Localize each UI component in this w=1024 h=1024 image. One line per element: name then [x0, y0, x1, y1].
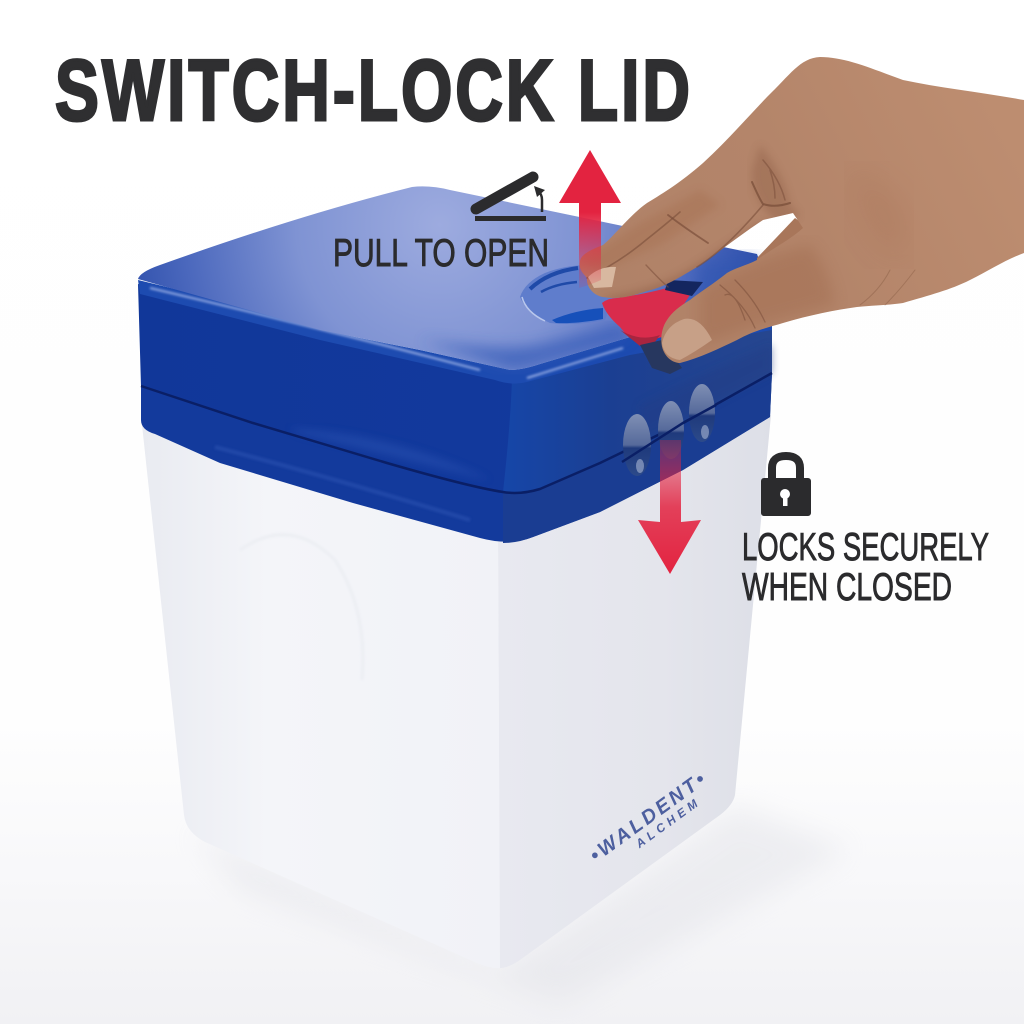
thumbnail [662, 319, 712, 360]
red switch tab [602, 280, 703, 346]
label: pull to open: PULL TO OPEN [333, 232, 549, 275]
lower blue band [141, 373, 772, 543]
container body: right face [498, 415, 771, 968]
hand shading [601, 150, 831, 338]
fingernail [588, 267, 616, 288]
seam line [141, 373, 772, 493]
icon: open lid [475, 177, 546, 221]
brand logo: •WALDENT• [586, 769, 709, 867]
hand [580, 57, 1024, 363]
switch latch below tab [640, 340, 682, 374]
embossed circle on body [240, 535, 363, 680]
finger recess on lid [520, 265, 612, 324]
arrow: pull up [559, 150, 621, 288]
label: locks securely: WHEN CLOSED [742, 566, 952, 609]
title: SWITCH-LOCK LID [55, 43, 693, 139]
brand logo: ALCHEM [632, 796, 701, 851]
finger behind [757, 218, 806, 262]
label: locks securely [742, 526, 989, 609]
knuckle and finger creases [587, 160, 915, 328]
blue lid skirt [138, 284, 772, 493]
lid rim [138, 280, 772, 384]
icon: padlock [761, 456, 811, 516]
rim highlights [150, 288, 623, 378]
floor shadow [190, 805, 850, 1005]
container body: left face [142, 425, 500, 968]
hand silhouette [580, 57, 1024, 363]
lock bumps [622, 384, 716, 476]
container [138, 186, 772, 968]
arrow: lock down [638, 440, 701, 574]
lid top surface [138, 186, 772, 370]
